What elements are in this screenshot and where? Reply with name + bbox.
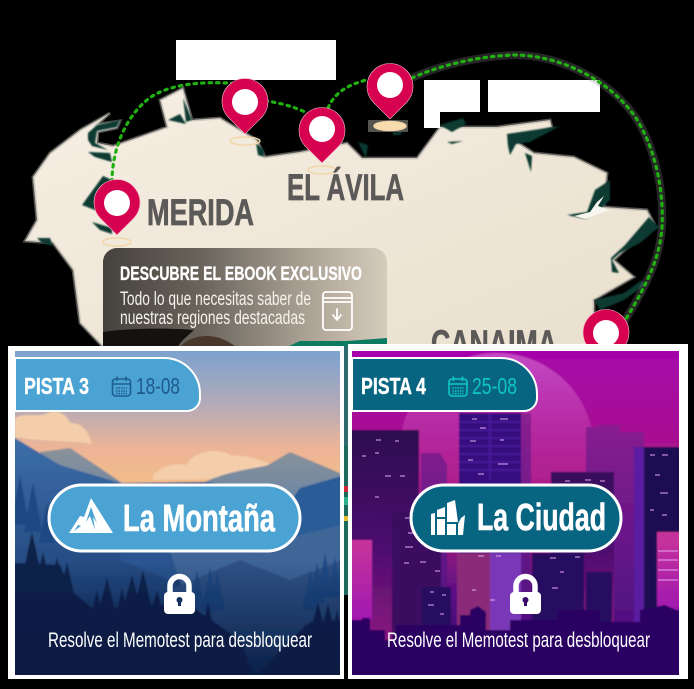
unlock message: Resolve el Memotest para desbloquear	[48, 629, 312, 652]
icon: lock	[510, 576, 541, 614]
far right tower	[633, 446, 679, 622]
title text: La Ciudad	[477, 497, 606, 539]
ebook photo strip	[103, 329, 387, 347]
route dotted line	[112, 55, 662, 322]
map section	[25, 40, 662, 365]
strip behind cards	[344, 346, 348, 595]
tab date: 25-08	[472, 373, 517, 399]
white label block: top	[176, 40, 336, 80]
mid mountains	[13, 437, 180, 600]
pin: Canaima	[582, 309, 630, 344]
ebook description: Todo lo que necesitas saber de	[120, 289, 311, 310]
pin: island	[367, 64, 413, 132]
route path halo	[412, 55, 662, 322]
white label blocks: right	[424, 80, 600, 128]
tower stripes	[459, 413, 521, 480]
label: Merida: MERIDA	[147, 192, 254, 233]
moon	[402, 352, 592, 494]
card: Pista 4 La Ciudad	[348, 344, 688, 679]
label: El Avila: EL ÁVILA	[287, 167, 404, 208]
icon: calendar	[449, 376, 467, 396]
title button	[411, 485, 621, 551]
city scene	[350, 349, 681, 677]
icon: ebook download	[323, 292, 352, 330]
skyline silhouette	[350, 605, 681, 677]
pin: Merida	[94, 180, 140, 246]
tab date: 18-08	[136, 373, 180, 399]
ebook callout	[103, 248, 387, 347]
mountain scene	[11, 349, 345, 677]
icon: city	[431, 500, 465, 535]
icon: calendar	[112, 376, 130, 396]
back buildings	[420, 412, 645, 611]
tab title: PISTA 3	[24, 373, 89, 399]
tab title: PISTA 4	[361, 373, 426, 399]
city windows	[362, 419, 678, 614]
pin: El Avila	[299, 108, 345, 174]
title text: La Montaña	[123, 498, 276, 540]
icon: mountain	[69, 498, 113, 533]
foreground trees	[24, 532, 340, 628]
far mountains	[40, 447, 340, 498]
lower buildings	[392, 512, 441, 650]
icon: lock	[164, 576, 195, 614]
map of Venezuela	[25, 88, 659, 347]
foreground forest	[13, 563, 342, 677]
title button	[49, 485, 300, 551]
pin: north coast	[222, 79, 268, 145]
tab	[352, 358, 537, 411]
background trees	[11, 475, 343, 612]
card: Pista 3 La Montaña	[8, 346, 345, 679]
clouds	[15, 411, 280, 480]
ebook description: nuestras regiones destacadas	[120, 308, 305, 329]
ebook description	[120, 289, 311, 329]
tab	[15, 358, 200, 411]
main towers	[350, 430, 614, 640]
label: Canaima: CANAIMA	[431, 323, 557, 364]
ebook heading: DESCUBRE EL EBOOK EXCLUSIVO	[120, 264, 362, 285]
